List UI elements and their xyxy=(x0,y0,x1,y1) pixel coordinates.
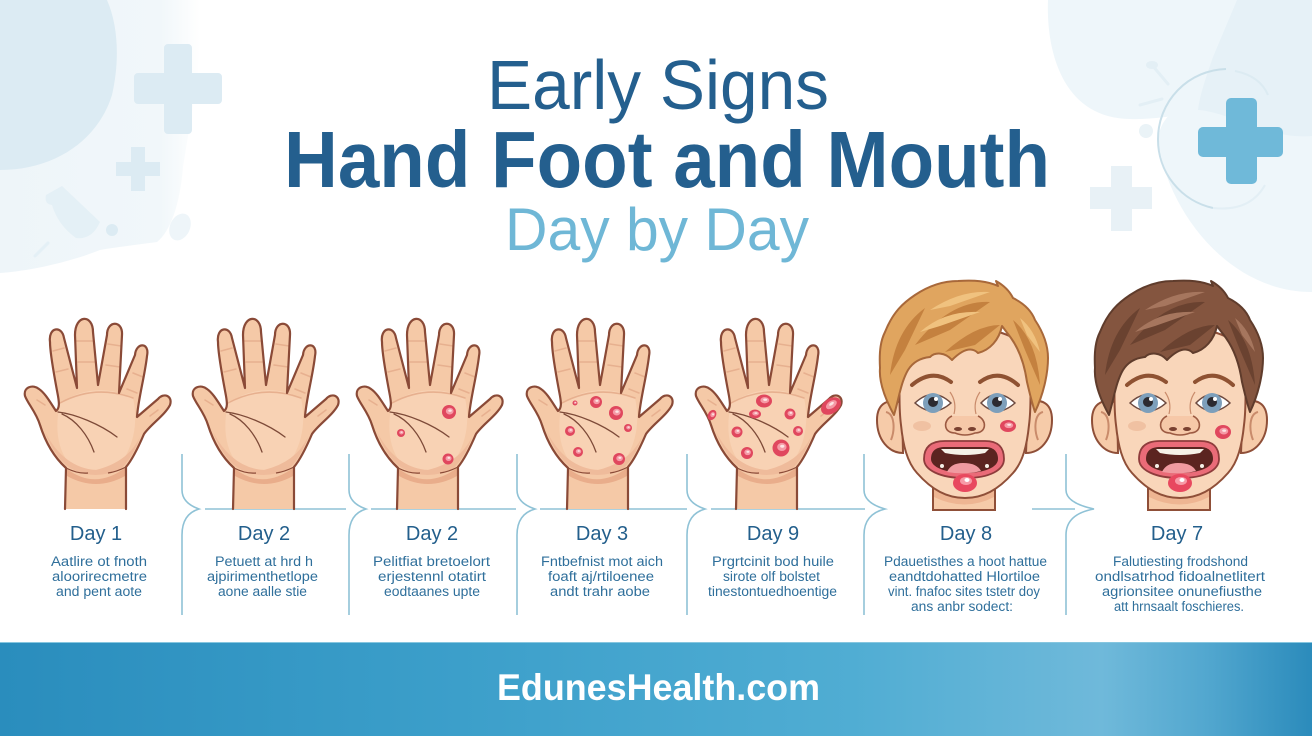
subtitle: Day by Day: Day by Day xyxy=(505,196,809,263)
blisters: hand 3 xyxy=(397,405,456,464)
description: Day 3: foaft aj/rtiloenee xyxy=(548,569,654,584)
step 2: healthy hand xyxy=(193,319,339,599)
description: Day 7: att hrnsaalt foschieres. xyxy=(1114,599,1244,614)
title: Hand Foot and Mouth: Hand Foot and Mouth xyxy=(284,115,1050,204)
description: Day 9: tinestontuedhoentige xyxy=(708,584,837,599)
label: second Day 2: Day 2 xyxy=(406,523,458,545)
description: Day 3 xyxy=(541,554,663,599)
description: second Day 2 xyxy=(373,554,490,599)
description: Day 8: Pdauetisthes a hoot hattue xyxy=(884,554,1047,569)
description: Day 1: Aatlire ot fnoth xyxy=(51,554,147,569)
timeline connectors xyxy=(182,454,1094,615)
description: Day 7 xyxy=(1095,554,1265,614)
description: Day 1: aloorirecmetre xyxy=(52,569,147,584)
description: Day 1 xyxy=(51,554,147,599)
description: Day 9: sirote olf bolstet xyxy=(723,569,820,584)
description: second Day 2: erjestennl otatirt xyxy=(378,569,486,584)
label: Day 3: Day 3 xyxy=(576,523,628,545)
description: second Day 2: eodtaanes upte xyxy=(384,584,480,599)
footer website text: EdunesHealth.com xyxy=(497,667,820,708)
label: Day 2: Day 2 xyxy=(238,523,290,545)
label: Day 1: Day 1 xyxy=(70,523,122,545)
red spot on cheek xyxy=(1215,425,1231,439)
description: Day 8: ans anbr sodect: xyxy=(911,599,1013,614)
decor: top-left background shapes xyxy=(0,0,222,273)
description: Day 7: agrionsitee onunefiusthe xyxy=(1102,584,1262,599)
label: Day 8: Day 8 xyxy=(940,523,992,545)
title: Early Signs: Early Signs xyxy=(487,46,829,124)
description: Day 8: eandtdohatted Hlortiloe xyxy=(889,569,1040,584)
description: Day 9 xyxy=(708,554,837,599)
description: Day 2: aone aalle stie xyxy=(218,584,307,599)
description: Day 3: andt trahr aobe xyxy=(550,584,650,599)
step 6: child face with blond hair xyxy=(877,281,1052,614)
red spot on cheek xyxy=(1000,420,1016,432)
hair: brown xyxy=(1095,281,1263,415)
step 1: healthy hand xyxy=(25,319,171,599)
description: Day 2: ajpirimenthetlope xyxy=(207,569,318,584)
description: Day 1: and pent aote xyxy=(56,584,142,599)
step 4: hand with more spots xyxy=(527,319,673,599)
description: Day 3: Fntbefnist mot aich xyxy=(541,554,663,569)
description: Day 8 xyxy=(884,554,1047,614)
footer band xyxy=(0,642,1312,736)
description: second Day 2: Pelitfiat bretoelort xyxy=(373,554,490,569)
description: Day 7: Falutiesting frodshond xyxy=(1113,554,1248,569)
blisters: hand 4 xyxy=(565,396,632,465)
icon: pale medical cross xyxy=(1090,166,1152,231)
description: Day 2 xyxy=(207,554,318,599)
label: Day 9: Day 9 xyxy=(747,523,799,545)
decor: top-right background shapes xyxy=(1048,0,1312,292)
step 3: hand with first spots xyxy=(357,319,503,599)
hair: blond xyxy=(880,281,1048,415)
step 7: child face with brown hair xyxy=(1092,281,1267,614)
icon: large medical cross xyxy=(1198,98,1283,184)
label: Day 7: Day 7 xyxy=(1151,523,1203,545)
description: Day 9: Prgrtcinit bod huile xyxy=(712,554,834,569)
blisters: hand 5 xyxy=(706,394,844,459)
description: Day 2: Petuett at hrd h xyxy=(215,554,313,569)
description: Day 8: vint. fnafoc sites tstetr doy xyxy=(888,584,1040,599)
step 5: hand with many spots xyxy=(696,319,844,599)
description: Day 7: ondlsatrhod fidoalnetlitert xyxy=(1095,569,1265,584)
